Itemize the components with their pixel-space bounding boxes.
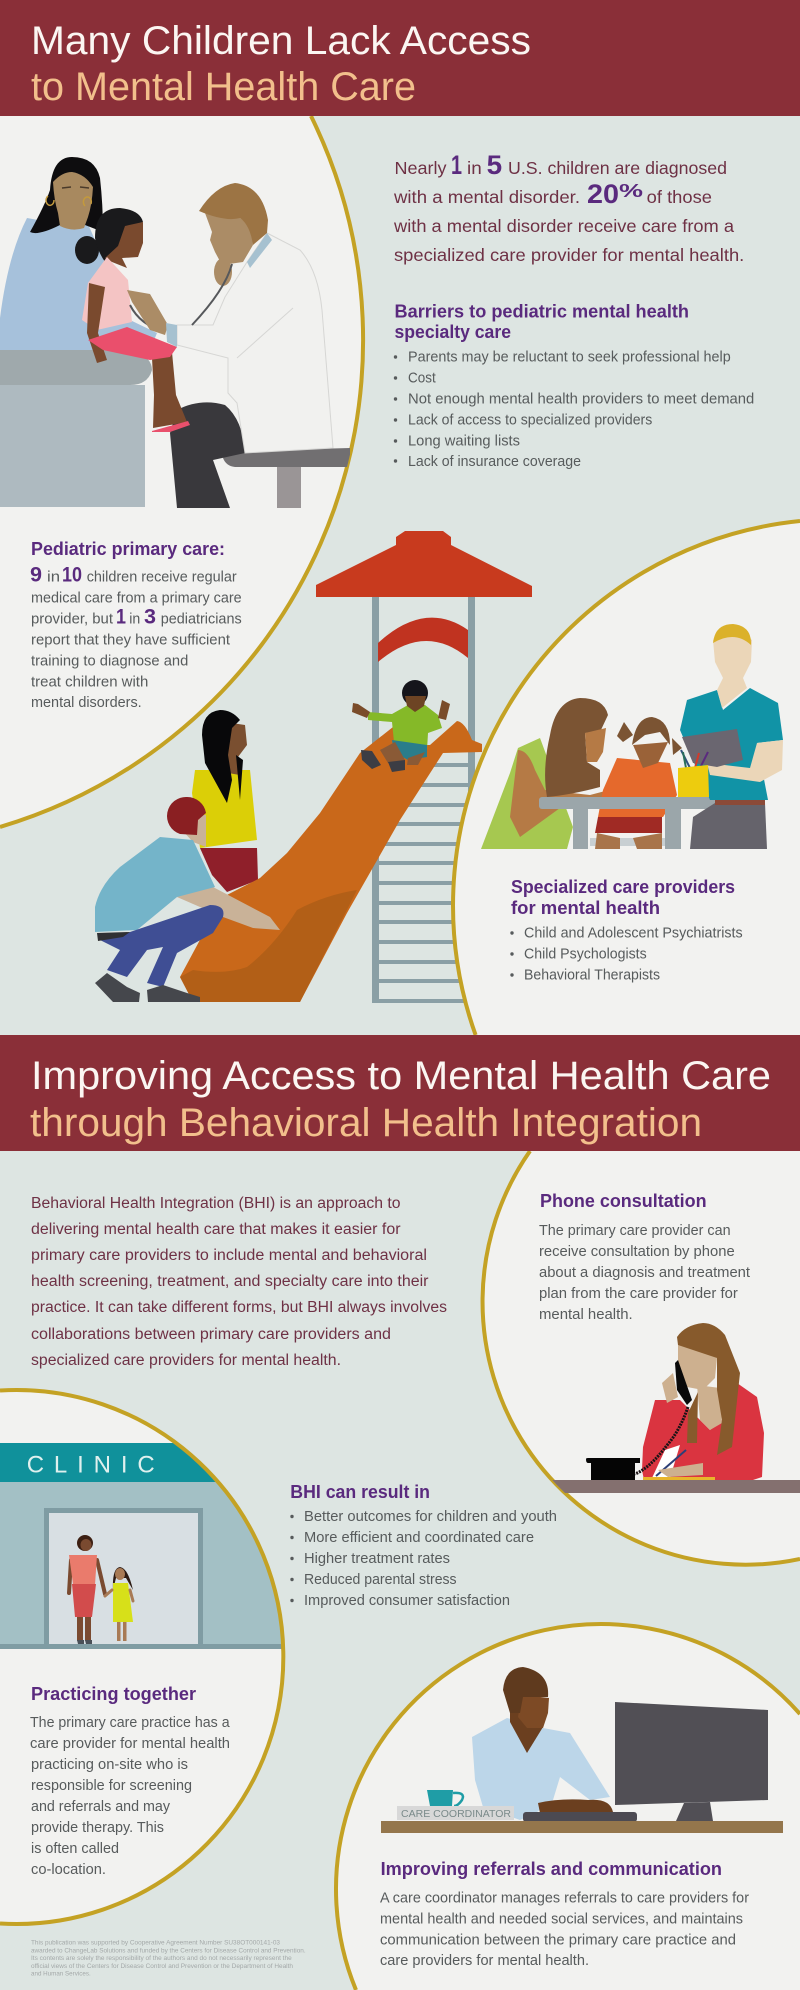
icon: stool — [223, 448, 350, 508]
text block: phone consultation: plan from the care provider for — [539, 1286, 738, 1302]
icon: woman — [635, 1323, 764, 1480]
text block: BHI definition: specialized care providers for mental health. — [31, 1352, 341, 1369]
text block: practicing together: care provider for mental health — [30, 1736, 230, 1752]
text block: improving referrals: communication between the primary care practice and — [380, 1932, 736, 1948]
icon: coordinator — [472, 1667, 613, 1820]
title: many children lack access: Many Children Lack Access — [31, 19, 531, 63]
text block: phone consultation: receive consultation by phone — [539, 1244, 735, 1260]
list: BHI results: Reduced parental stress — [304, 1572, 457, 1588]
text block: prevalence statistic: % — [619, 181, 643, 201]
text block: practicing together: provide therapy. This — [31, 1820, 164, 1836]
text block: BHI definition: practice. It can take different forms, but BHI always involves — [31, 1299, 447, 1316]
text block: pediatric stats: 9 — [30, 564, 42, 587]
text block: funding disclaimer: This publication was supported by Cooperative Agreement Number SU38OT000141-03 — [31, 1940, 280, 1946]
label: care coordinator: CARE COORDINATOR — [401, 1808, 511, 1820]
heading: practicing together: Practicing together — [31, 1684, 196, 1704]
text block: pediatric stats: 10 — [62, 564, 82, 587]
list: BHI results: More efficient and coordinated care — [304, 1530, 534, 1546]
illustration: clinic building — [0, 1443, 300, 1649]
text block: pediatric stats: children receive regular — [87, 570, 237, 586]
heading: pediatric primary care: Pediatric primary care: — [31, 539, 225, 559]
icon: clinic door — [44, 1508, 203, 1644]
panel: improving referrals — [336, 1624, 800, 1990]
panel: BHI results — [290, 1482, 557, 1609]
text block: BHI definition — [31, 1195, 447, 1369]
icon: desk — [381, 1821, 783, 1833]
icon: pencil cup — [678, 750, 709, 797]
text block: pediatric stats: pediatricians — [161, 612, 242, 628]
icon: woman watching — [192, 710, 258, 892]
text block: pediatric stats — [30, 564, 242, 711]
text block: prevalence statistic: in — [467, 158, 482, 178]
heading: barriers: Barriers to pediatric mental health — [394, 302, 689, 322]
text block: prevalence statistic: 20 — [587, 179, 619, 209]
list: providers: Child Psychologists — [524, 946, 647, 962]
list: barriers: Not enough mental health providers to meet demand — [408, 391, 754, 407]
icon: coffee cup — [427, 1790, 463, 1806]
illustration: doctor examining child — [0, 157, 350, 508]
panel: specialized care providers — [453, 521, 800, 1035]
text block: phone consultation — [539, 1223, 750, 1323]
heading: specialized care providers — [511, 877, 735, 918]
heading: BHI can result in: BHI can result in — [290, 1482, 430, 1502]
text block: practicing together — [30, 1715, 231, 1878]
list: barriers — [394, 350, 754, 470]
heading: barriers — [394, 302, 689, 342]
icon: keyboard — [523, 1812, 637, 1822]
text block: prevalence statistic: U.S. children are diagnosed — [508, 158, 727, 178]
icon: man crouching — [95, 797, 280, 1002]
illustration: playground slide — [95, 531, 532, 1003]
list: providers: Child and Adolescent Psychiatrists — [524, 925, 743, 941]
icon: mother — [481, 698, 632, 849]
text block: practicing together: and referrals and may — [31, 1799, 171, 1815]
text block: prevalence statistic: 5 — [487, 150, 502, 180]
text block: funding disclaimer: awarded to ChangeLab Solutions and funded by the Centers for Disease Control and Prevention. — [31, 1947, 306, 1954]
icon: child on table — [75, 208, 190, 432]
panel: pediatric primary care — [0, 116, 363, 827]
list: barriers: Cost — [408, 371, 436, 387]
list: BHI results: Higher treatment rates — [304, 1551, 450, 1567]
title: many children lack access — [0, 0, 800, 116]
title: improving access: through Behavioral Health Integration — [30, 1101, 702, 1145]
text block: pediatric stats: training to diagnose and — [31, 653, 188, 669]
illustration: woman on phone — [552, 1323, 800, 1493]
text block: phone consultation: The primary care provider can — [539, 1223, 731, 1239]
text block: phone consultation: mental health. — [539, 1307, 633, 1323]
text block: pediatric stats: 1 — [116, 606, 126, 629]
text block: funding disclaimer: official views of the Centers for Disease Control and Prevention or the Department of Health — [31, 1963, 293, 1970]
text block: pediatric stats: provider, but — [31, 612, 113, 628]
icon: slide tower — [316, 531, 532, 1003]
text block: pediatric stats: 3 — [144, 606, 156, 629]
icon: girl — [590, 717, 682, 849]
title: improving access: Improving Access to Mental Health Care — [31, 1054, 771, 1098]
heading: barriers: specialty care — [394, 322, 511, 342]
icon: desk — [552, 1480, 800, 1493]
icon: clinic sign band — [0, 1443, 216, 1482]
illustration: therapist with child — [481, 624, 783, 849]
text block: pediatric stats: report that they have sufficient — [31, 632, 230, 648]
list: barriers: Parents may be reluctant to seek professional help — [408, 350, 731, 366]
list: providers — [510, 925, 743, 983]
icon: computer monitor — [615, 1702, 768, 1821]
text block: prevalence statistic: 1 — [451, 150, 462, 180]
heading: phone consultation: Phone consultation — [540, 1191, 707, 1211]
icon: mother — [0, 157, 157, 350]
list: barriers: Long waiting lists — [408, 433, 520, 449]
heading: specialized care providers: for mental health — [511, 898, 660, 918]
label: clinic: CLINIC — [27, 1452, 155, 1479]
list: BHI results: Improved consumer satisfaction — [304, 1593, 510, 1609]
icon: exam table — [0, 350, 152, 507]
text block: BHI definition: delivering mental health care that makes it easier for — [31, 1221, 400, 1238]
list: barriers: Lack of access to specialized providers — [408, 412, 652, 428]
text block: practicing together: The primary care practice has a — [30, 1715, 231, 1731]
text block: practicing together: responsible for screening — [31, 1778, 192, 1794]
list: BHI results: Better outcomes for children and youth — [304, 1509, 557, 1525]
text block: BHI definition: health screening, treatment, and specialty care into their — [31, 1273, 428, 1290]
icon: therapist — [680, 624, 783, 849]
text block: practicing together: co-location. — [31, 1862, 106, 1878]
text block: phone consultation: about a diagnosis and treatment — [539, 1265, 750, 1281]
icon: doctor hand and stethoscope — [127, 290, 177, 347]
text block: pediatric stats: medical care from a primary care — [31, 591, 242, 607]
text block: prevalence statistic: specialized care provider for mental health. — [394, 245, 744, 265]
text block: practicing together: is often called — [31, 1841, 119, 1857]
text block: pediatric stats: treat children with — [31, 674, 148, 690]
text block: BHI definition: collaborations between primary care providers and — [31, 1326, 391, 1343]
text block: prevalence statistic: of those — [647, 187, 712, 207]
text block: practicing together: practicing on-site who is — [31, 1757, 188, 1773]
title: many children lack access: to Mental Health Care — [31, 65, 416, 109]
icon: clinic wall — [0, 1482, 300, 1644]
icon: orange slide — [180, 721, 482, 1002]
text block: BHI definition: Behavioral Health Integration (BHI) is an approach to — [31, 1195, 400, 1212]
text block: pediatric stats: mental disorders. — [31, 695, 142, 711]
text block: funding disclaimer: Its contents are solely the responsibility of the authors and do not necessarily represent the — [31, 1955, 292, 1962]
icon: doctor body — [170, 183, 333, 508]
icon: child sliding — [352, 680, 450, 772]
heading: specialized care providers: Specialized care providers — [511, 877, 735, 897]
heading: improving referrals: Improving referrals and communication — [381, 1859, 722, 1879]
text block: prevalence statistic: with a mental disorder. — [393, 187, 580, 207]
list: barriers: Lack of insurance coverage — [408, 454, 581, 470]
text block: pediatric stats: in — [129, 612, 140, 628]
icon: telephone base — [586, 1458, 640, 1480]
list: BHI results — [290, 1509, 557, 1609]
text block: improving referrals: A care coordinator manages referrals to care providers for — [380, 1890, 749, 1906]
text block: improving referrals: mental health and needed social services, and maintains — [380, 1912, 743, 1928]
text block: funding disclaimer — [31, 1940, 306, 1978]
panel: phone consultation — [483, 1151, 800, 1565]
text block: prevalence statistic — [393, 150, 744, 265]
title: improving access — [0, 1035, 800, 1151]
icon: mother and child — [69, 1535, 133, 1644]
text block: funding disclaimer: and Human Services. — [31, 1970, 91, 1978]
text block: improving referrals — [380, 1890, 749, 1969]
icon: table — [539, 797, 715, 849]
panel: prevalence text — [393, 150, 754, 470]
text block: BHI definition: primary care providers to include mental and behavioral — [31, 1247, 427, 1264]
illustration: care coordinator at desk — [381, 1667, 783, 1833]
list: providers: Behavioral Therapists — [524, 967, 660, 983]
text block: prevalence statistic: Nearly — [394, 158, 447, 178]
text block: pediatric stats: in — [47, 570, 60, 586]
panel: practicing together — [0, 1390, 300, 1924]
text block: prevalence statistic: with a mental disorder receive care from a — [393, 216, 734, 236]
text block: improving referrals: care providers for mental health. — [380, 1953, 589, 1969]
